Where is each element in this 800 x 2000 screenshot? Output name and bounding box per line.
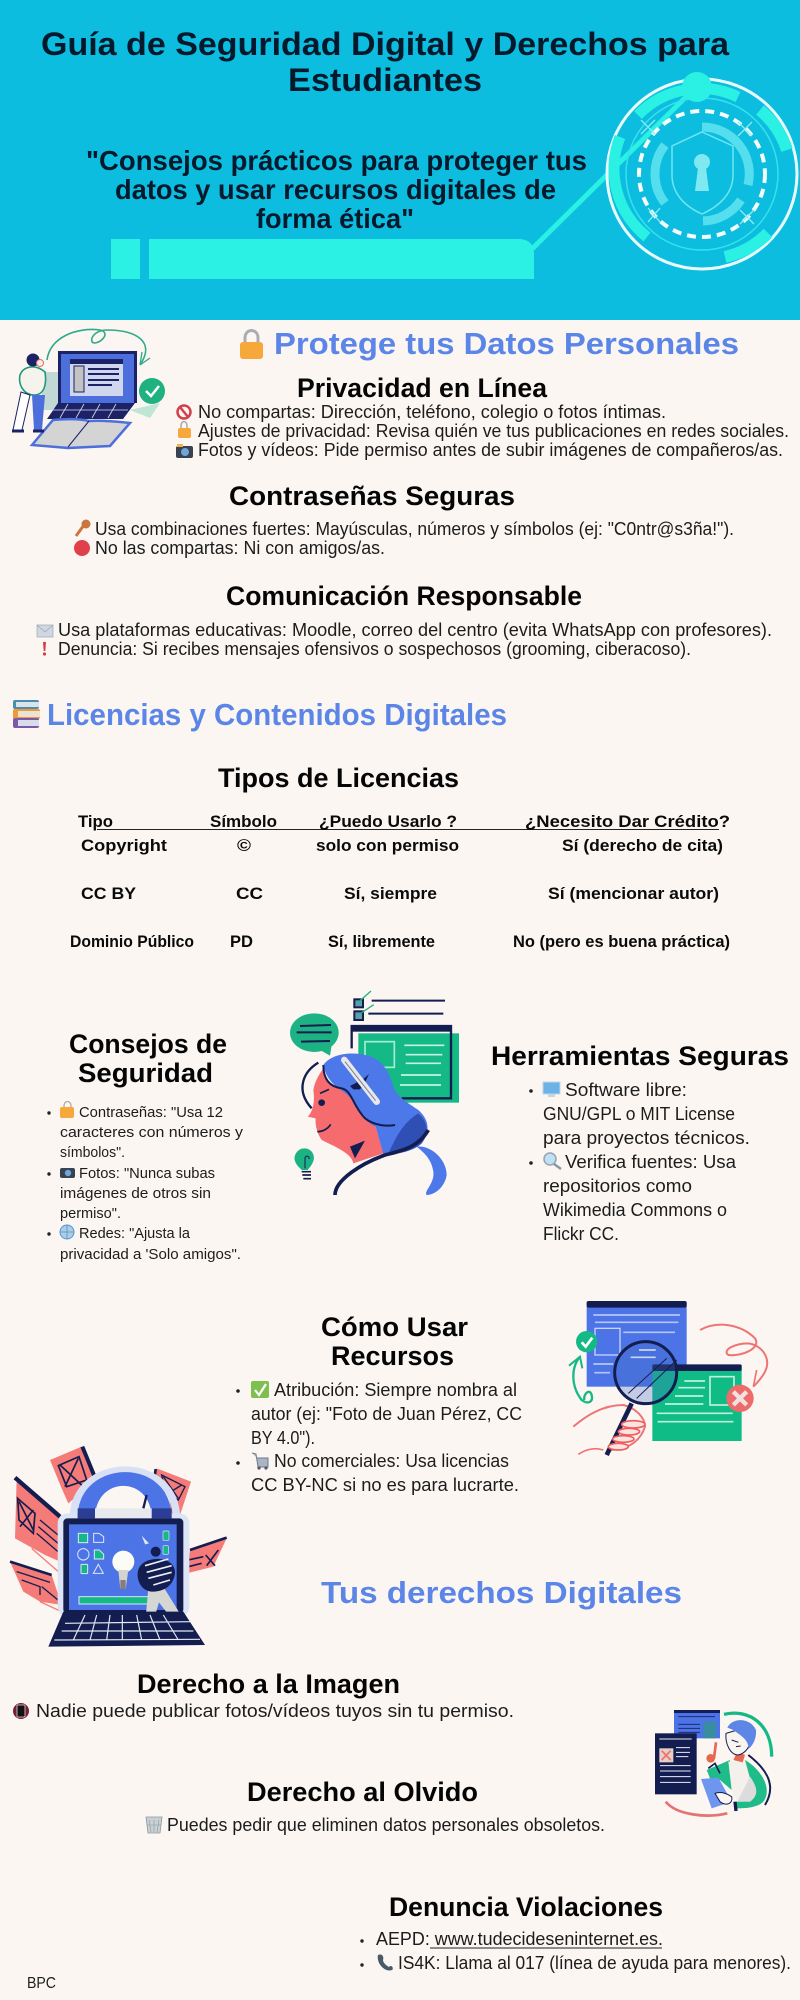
table: license types: Sí, libremente (328, 933, 435, 951)
panel: Licencias y Contenidos Digitales (13, 697, 730, 951)
table: license types: Copyright (81, 837, 168, 855)
block: Comunicación Responsable: Comunicación Responsable (226, 581, 582, 611)
list: imágenes de otros sin (60, 1185, 211, 1202)
table: license types: Sí (mencionar autor) (548, 885, 719, 903)
block: Denuncia Violaciones: AEPD: www.tudecideseninternet.es. (376, 1929, 663, 1949)
heading: Licencias y Contenidos Digitales (47, 697, 507, 732)
block: Derecho al Olvido: Puedes pedir que eliminen datos personales obsoletos. (167, 1815, 605, 1835)
list: Flickr CC. (543, 1224, 619, 1244)
table: license types: Dominio Público (70, 933, 194, 951)
table: license types: Símbolo (210, 813, 277, 831)
list (529, 1080, 750, 1244)
list: permiso". (60, 1205, 121, 1222)
heading: Cómo Usar (321, 1312, 469, 1342)
list: Verifica fuentes: Usa (565, 1152, 737, 1172)
panel: Tus derechos Digitales (13, 1575, 791, 1973)
list: para proyectos técnicos. (543, 1128, 750, 1148)
list: autor (ej: "Foto de Juan Pérez, CC (251, 1404, 522, 1424)
list (47, 1102, 244, 1263)
heading: Herramientas Seguras (491, 1041, 789, 1071)
title (41, 26, 729, 98)
illustration: laptop with person and book (12, 329, 165, 448)
list: Redes: "Ajusta la (79, 1225, 191, 1242)
block: Privacidad en Línea (176, 373, 789, 460)
table: license types: CC BY (81, 885, 136, 903)
subtitle (86, 145, 587, 234)
block: Derecho a la Imagen: Nadie puede publicar fotos/vídeos tuyos sin tu permiso. (36, 1701, 514, 1721)
list: Wikimedia Commons o (543, 1200, 727, 1220)
illustration: padlock laptop with person (10, 1447, 227, 1647)
list: Software libre: (565, 1080, 687, 1100)
block: Derecho a la Imagen (13, 1669, 514, 1721)
table: license types: No (pero es buena práctica) (513, 933, 730, 951)
heading: Recursos (331, 1341, 454, 1371)
block: Contraseñas Seguras: Contraseñas Seguras (229, 481, 515, 511)
heading (69, 1029, 227, 1088)
footer credit: BPC (27, 1975, 56, 1992)
subtitle: forma ética" (256, 203, 414, 234)
heading: Seguridad (78, 1058, 213, 1088)
block: Contraseñas Seguras (74, 481, 734, 558)
block: Derecho a la Imagen: Derecho a la Imagen (137, 1669, 400, 1699)
list: Fotos: "Nunca subas (79, 1165, 215, 1182)
illustration: woman with documents (655, 1710, 772, 1816)
subtitle: datos y usar recursos digitales de (115, 174, 556, 205)
block: Privacidad en Línea: Privacidad en Línea (297, 373, 548, 403)
block: Comunicación Responsable: Usa plataformas educativas: Moodle, correo del centro (evita WhatsApp con profesores). (58, 620, 772, 640)
table: license types: solo con permiso (316, 837, 459, 855)
block: Privacidad en Línea: Fotos y vídeos: Pide permiso antes de subir imágenes de compañeros/as. (198, 440, 783, 460)
list: repositorios como (543, 1176, 692, 1196)
subtitle: "Consejos prácticos para proteger tus (86, 145, 587, 176)
block: Denuncia Violaciones (360, 1892, 791, 1973)
list: Contraseñas: "Usa 12 (79, 1104, 223, 1121)
panel: Cómo Usar Recursos (236, 1312, 522, 1495)
title: Guía de Seguridad Digital y Derechos para (41, 26, 729, 62)
list: privacidad a 'Solo amigos". (60, 1246, 241, 1263)
icon: lock (240, 330, 263, 359)
panel: Protege tus Datos Personales (37, 326, 789, 659)
sub-heading: Tipos de Licencias: Tipos de Licencias (218, 763, 459, 793)
heading: Consejos de (69, 1029, 227, 1059)
block: Privacidad en Línea: No compartas: Dirección, teléfono, colegio o fotos íntimas. (198, 402, 666, 422)
block: Comunicación Responsable: Denuncia: Si recibes mensajes ofensivos o sospechosos (grooming, ciberacoso). (58, 639, 691, 659)
block: Privacidad en Línea: Ajustes de privacidad: Revisa quién ve tus publicaciones en redes sociales. (198, 421, 789, 441)
list: símbolos". (60, 1144, 125, 1161)
block: Denuncia Violaciones: IS4K: Llama al 017 (línea de ayuda para menores). (398, 1953, 791, 1973)
icon: books (13, 700, 40, 728)
table: license types: PD (230, 933, 253, 951)
block: Derecho al Olvido: Derecho al Olvido (247, 1777, 478, 1807)
list: Atribución: Siempre nombra al (274, 1380, 517, 1400)
list: BY 4.0"). (251, 1428, 315, 1448)
table: license types: ¿Puedo Usarlo ? (319, 813, 457, 831)
panel: Herramientas Seguras (491, 1041, 789, 1244)
table: license types: © (237, 837, 251, 855)
block: Derecho al Olvido (146, 1777, 605, 1835)
list: caracteres con números y (60, 1124, 244, 1141)
list: CC BY-NC si no es para lucrarte. (251, 1475, 519, 1495)
table: license types: ¿Necesito Dar Crédito? (525, 813, 730, 831)
block: Contraseñas Seguras: Usa combinaciones fuertes: Mayúsculas, números y símbolos (ej: "C0ntr@s3ña!"). (95, 519, 734, 539)
heading (321, 1312, 469, 1371)
illustration: head with pencil and documents (290, 991, 459, 1195)
heading: Tus derechos Digitales (321, 1575, 682, 1610)
block: Denuncia Violaciones: Denuncia Violaciones (389, 1892, 663, 1922)
table: license types: Tipo (78, 813, 113, 831)
list: GNU/GPL o MIT License (543, 1104, 735, 1124)
title: Estudiantes (288, 62, 482, 98)
table: license types: CC (236, 885, 263, 903)
heading: Protege tus Datos Personales (274, 326, 739, 361)
table: license types (70, 813, 730, 951)
list (236, 1380, 522, 1495)
illustration: magnifier over web pages (569, 1301, 767, 1455)
block: Contraseñas Seguras: No las compartas: Ni con amigos/as. (95, 538, 385, 558)
list: No comerciales: Usa licencias (274, 1451, 509, 1471)
panel: Consejos de Seguridad (47, 1029, 244, 1263)
table: license types: Sí (derecho de cita) (562, 837, 723, 855)
table: license types: Sí, siempre (344, 885, 437, 903)
icon: security shield dial (607, 72, 797, 269)
decorative cyan bars (111, 86, 697, 279)
panel: header banner (0, 0, 800, 320)
block: Comunicación Responsable (37, 581, 772, 659)
